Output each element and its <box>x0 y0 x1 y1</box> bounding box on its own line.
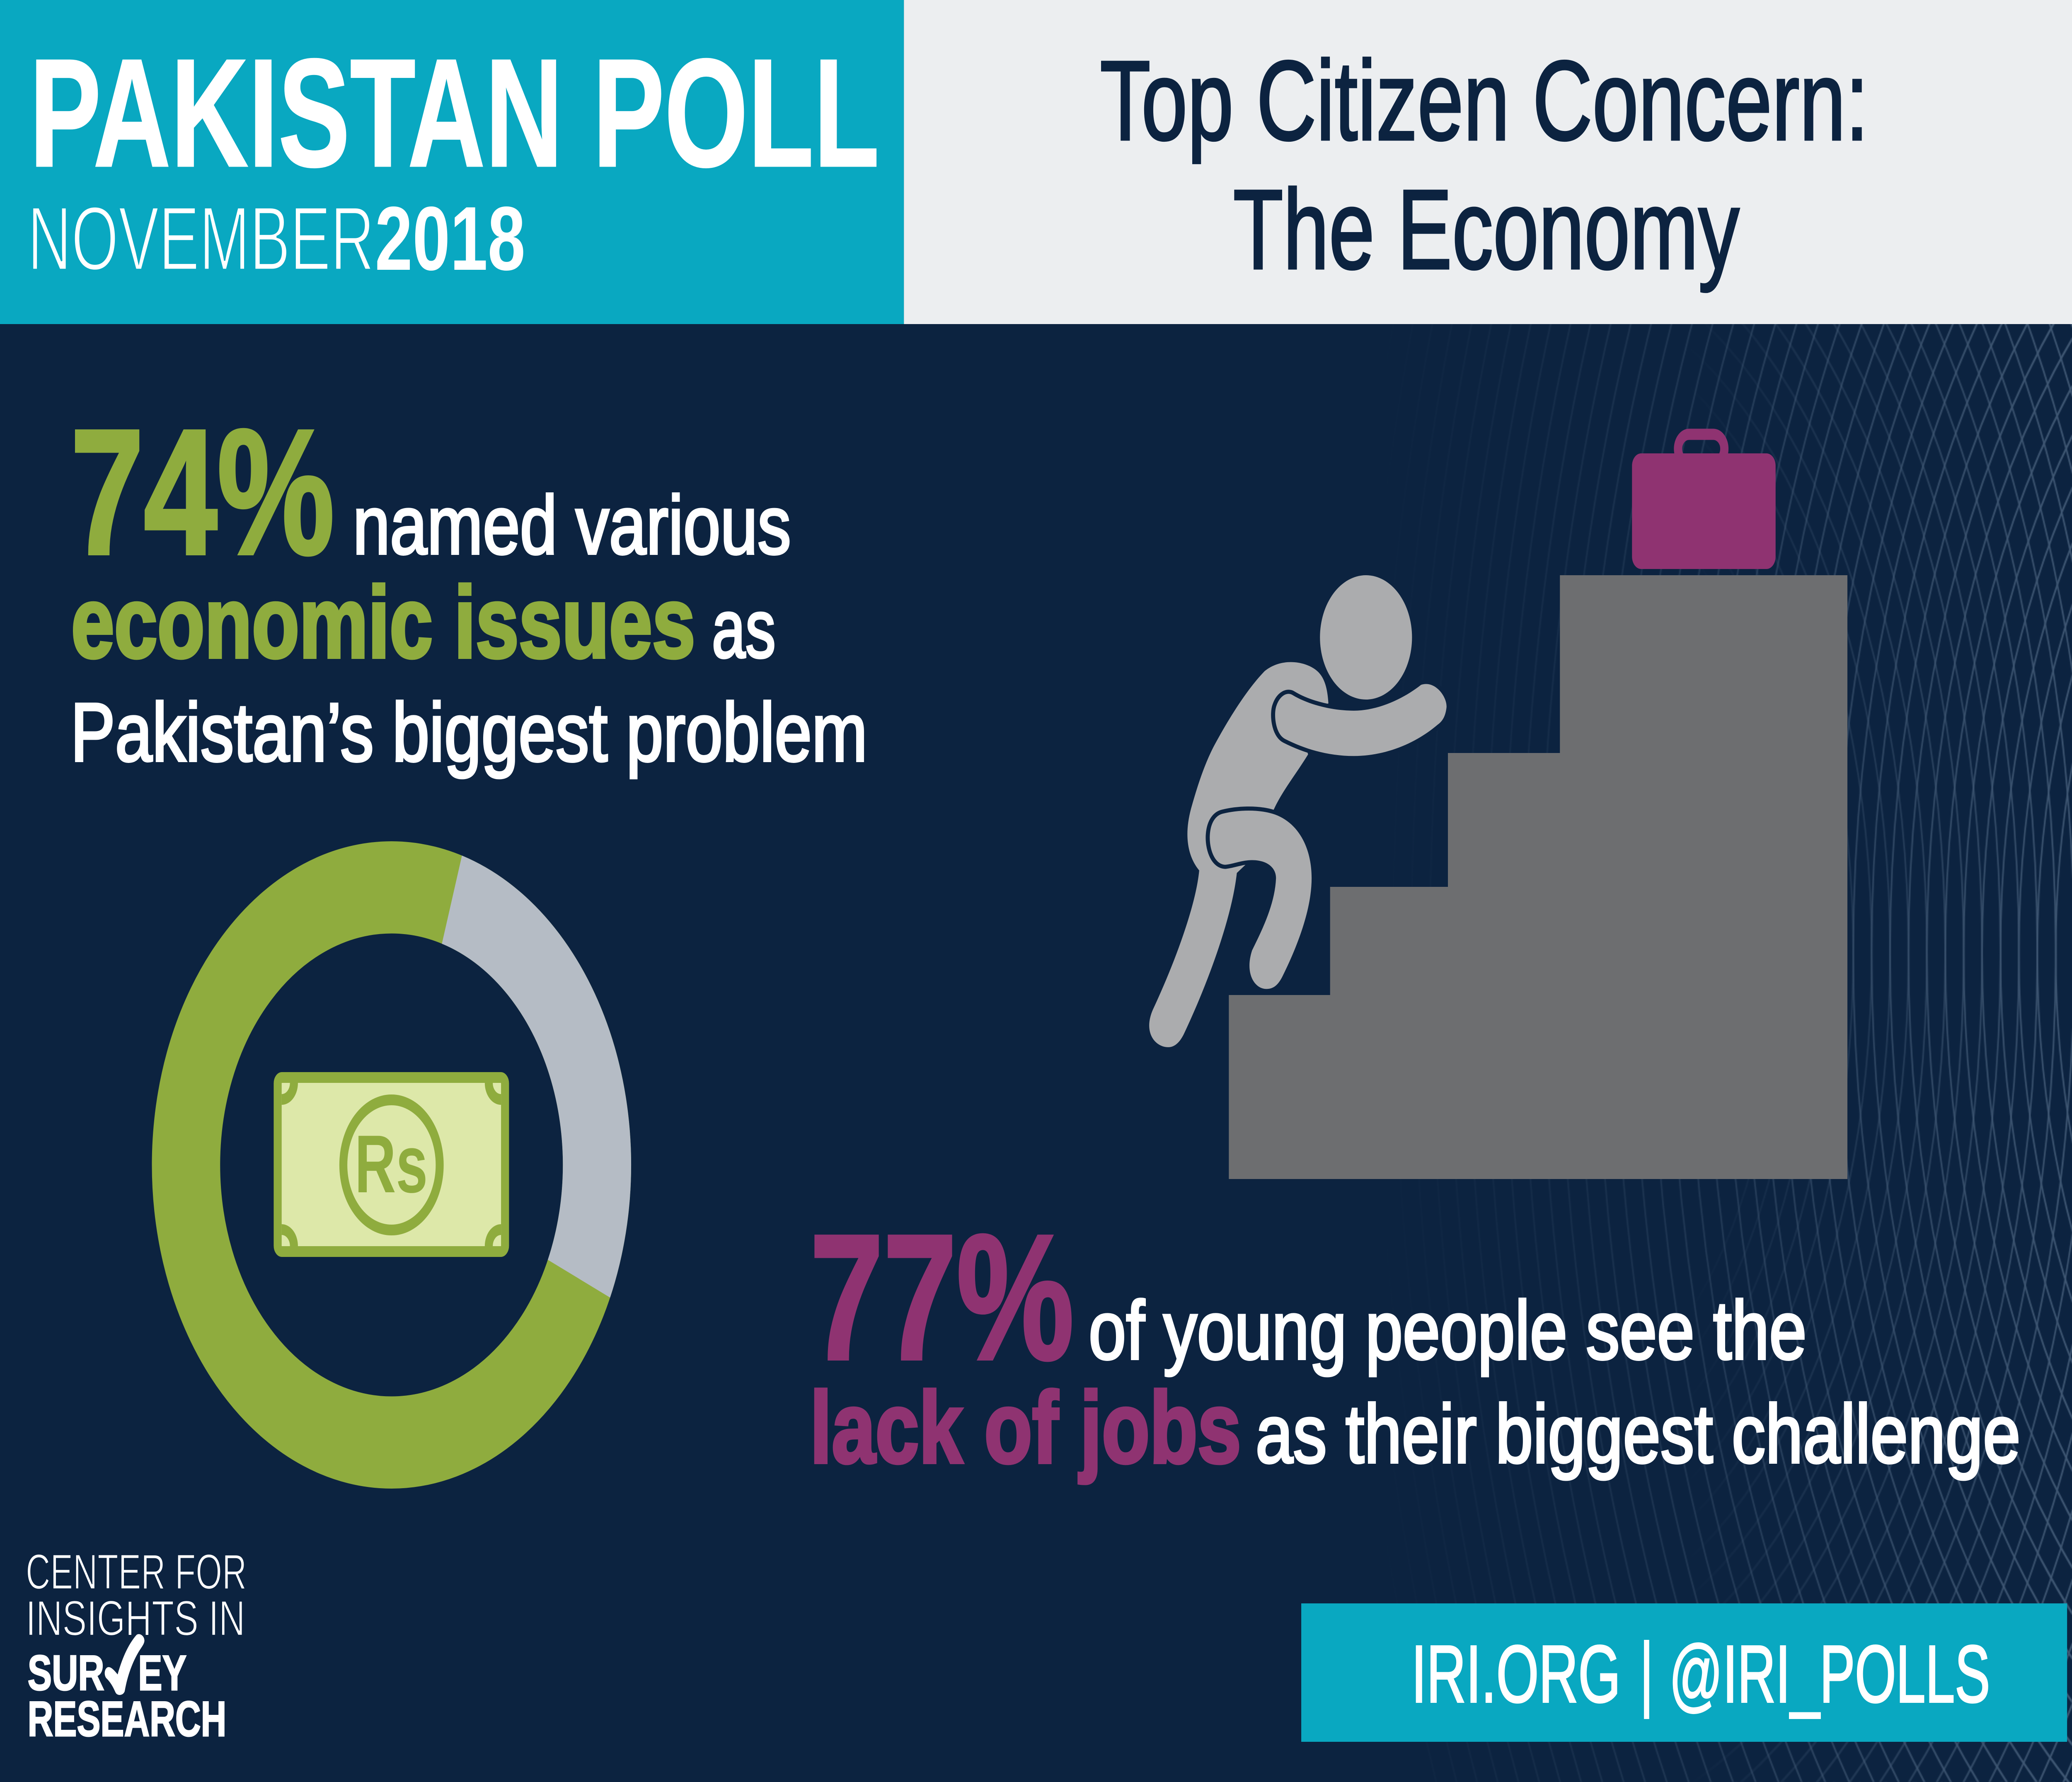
illustration: staircase <box>1229 575 1847 1179</box>
subtitle: NOVEMBER 2018: 2018 <box>375 188 525 289</box>
stat: 77%: 77% <box>810 1198 1074 1397</box>
text block: 77% lack of jobs: of young people see the <box>1089 1284 1807 1377</box>
header panel: Top Citizen Concern <box>904 0 2072 324</box>
text block: 74% economic issues <box>70 393 867 779</box>
icon: rupee banknote: Rs <box>355 1118 428 1210</box>
logo: Center for Insights in Survey Research: EY <box>138 1645 186 1701</box>
stat: 74%: 74% <box>70 393 334 592</box>
footer bar: website and handle: @IRI_POLLS <box>1669 1629 1990 1719</box>
text block: 77% lack of jobs: as their biggest challenge <box>1256 1388 2021 1480</box>
title: PAKISTAN POLL: PAKISTAN POLL <box>29 27 879 199</box>
icon: rupee banknote <box>278 1077 505 1252</box>
logo: Center for Insights in Survey Research <box>26 1544 247 1747</box>
logo: Center for Insights in Survey Research: INSIGHTS IN <box>26 1591 245 1646</box>
icon: person climbing stairs <box>1149 575 1447 1047</box>
icon: check mark <box>105 1634 144 1695</box>
text block: 74% economic issues: named various <box>353 479 791 571</box>
text block: 74% economic issues: economic issues <box>71 567 695 679</box>
text block: 77% lack of jobs: lack of jobs <box>810 1372 1241 1484</box>
footer bar: website and handle: IRI.ORG <box>1411 1629 1621 1719</box>
logo: Center for Insights in Survey Research: SUR <box>28 1645 104 1701</box>
text block: 74% economic issues: as <box>712 583 776 675</box>
footer bar: website and handle <box>1301 1603 2067 1742</box>
icon: briefcase <box>1632 434 1776 569</box>
text block: 77% lack of jobs <box>810 1198 2021 1484</box>
text block: 74% economic issues: Pakistan’s biggest problem <box>70 686 867 779</box>
subtitle: NOVEMBER 2018: NOVEMBER <box>28 188 374 289</box>
heading: Top Citizen Concern:: Top Citizen Concern: <box>1100 37 1869 164</box>
donut chart: 74 percent economic issues <box>186 855 631 1443</box>
header panel: Pakistan Poll <box>0 0 904 324</box>
logo: Center for Insights in Survey Research: CENTER FOR <box>26 1544 247 1600</box>
heading: The Economy: The Economy <box>1233 166 1739 293</box>
logo: Center for Insights in Survey Research: RESEARCH <box>28 1691 226 1747</box>
